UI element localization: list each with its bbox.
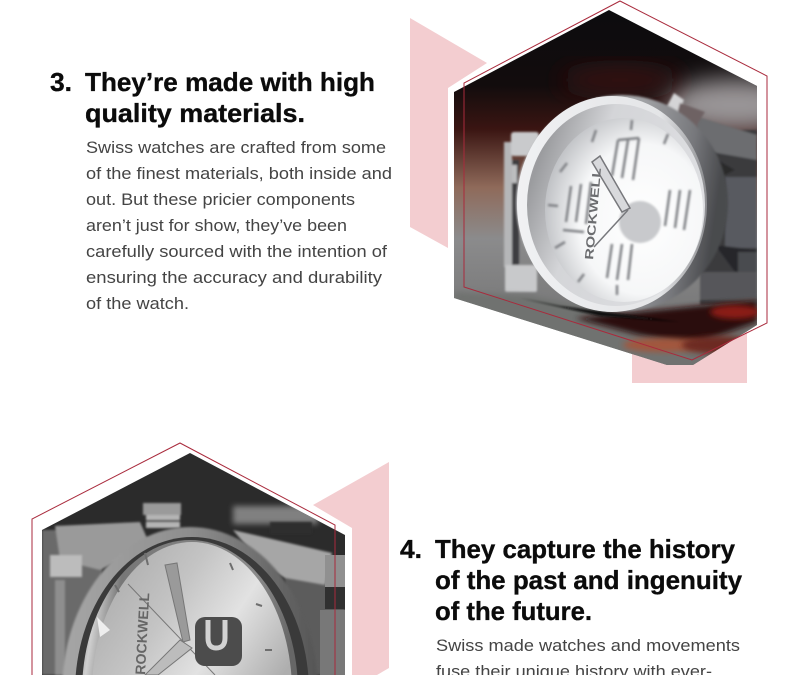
hands and subdial [619,201,661,243]
photo: black and white watch close-up: ROCKWELL [132,592,152,675]
heading: item 3: They’re made with high [85,67,375,97]
U numeral [195,617,242,666]
heading: item 4: 4. [400,534,422,564]
body text: item 3 [86,138,392,313]
body text: item 3: aren’t just for show, they’ve been [86,216,347,235]
crown [143,503,181,528]
ground surface [454,292,757,370]
heading: item 4 [400,534,743,626]
body text: item 3: of the watch. [86,294,189,313]
left bracelet [504,132,539,292]
case [62,527,318,675]
lugs and bracelet [42,530,102,675]
body text: item 4 [436,636,740,675]
body text: item 3: carefully sourced with the intention of [86,242,387,261]
red hexagon outline top [464,1,767,360]
body text: item 3: Swiss watches are crafted from some [86,138,386,157]
pink accent: right of lower watch [313,462,389,675]
blurred background highlights [233,506,318,524]
heading: item 3 [50,67,375,128]
body text: item 3: ensuring the accuracy and durability [86,268,383,287]
heading: item 4: They capture the history [435,534,736,564]
body text: item 4: Swiss made watches and movements [436,636,740,655]
pink accent: lower right rectangle [632,330,747,383]
heading: item 4: of the future. [435,596,592,626]
heading: item 4: of the past and ingenuity [435,565,743,595]
markers, hands and logo [115,553,272,650]
numeral blocks and hour markers [548,120,690,295]
photo: black and white watch close-up [40,450,350,675]
right bracelet [695,116,757,305]
photo: silver watch on dark background [454,10,757,365]
heading: item 3: quality materials. [85,98,305,128]
body text: item 3: of the finest materials, both inside and [86,164,392,183]
body text: item 3: out. But these pricier components [86,190,355,209]
crown [666,93,705,128]
red hexagon outline bottom [32,443,335,675]
heading: item 3: 3. [50,67,72,97]
pink accent: upper left polygon [410,18,487,248]
photo: silver watch on dark background: ROCKWELL [582,167,604,260]
case [516,95,728,311]
